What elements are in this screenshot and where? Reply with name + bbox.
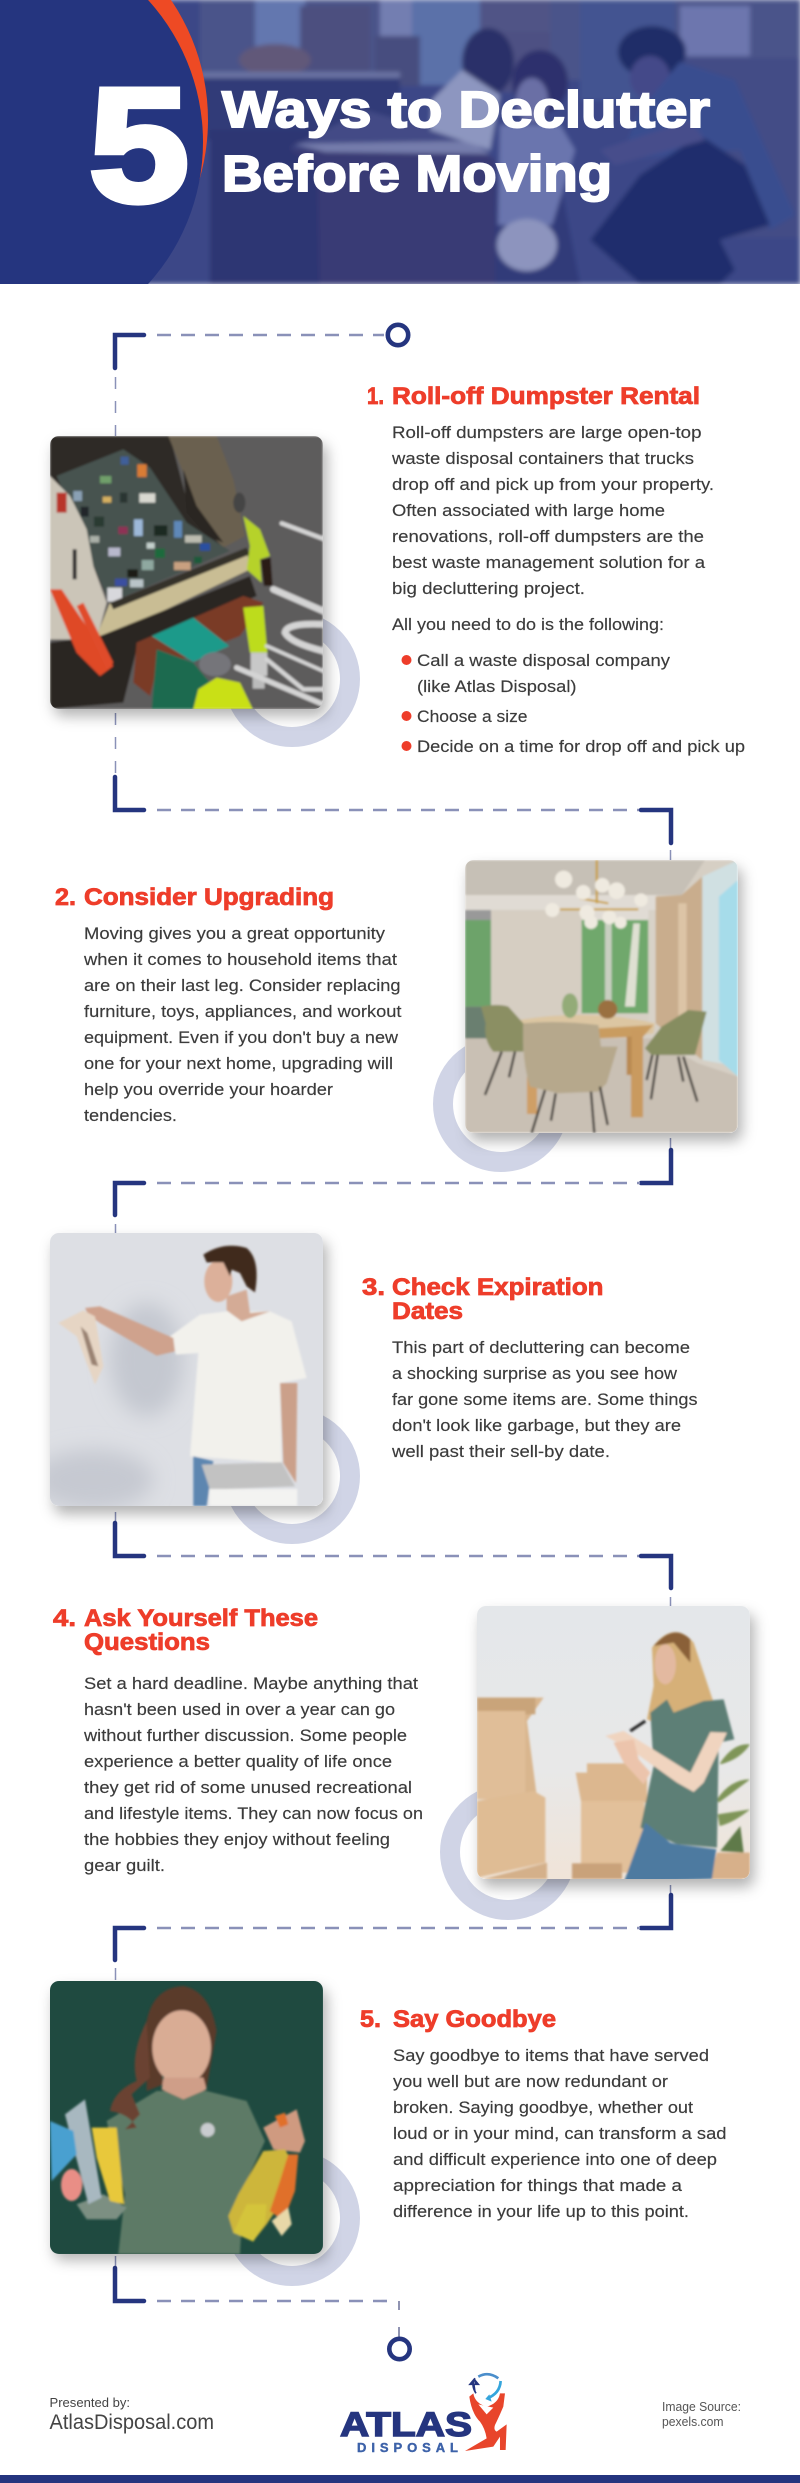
- text block: roll-off description: [391, 424, 714, 634]
- title: Before Moving: [222, 145, 612, 202]
- text block: questions: experience a better quality of life once: [84, 1753, 392, 1771]
- bullet list: (like Atlas Disposal): [417, 678, 576, 696]
- bullet list: [402, 652, 745, 756]
- text block: roll-off description: best waste management solution for a: [392, 554, 706, 572]
- text block: expiration dates: far gone some items are. Some things: [392, 1391, 698, 1409]
- header photo: man: [618, 26, 686, 78]
- text block: say goodbye: and difficult experience into one of deep: [393, 2151, 717, 2169]
- header photo: family packing boxes: [148, 0, 800, 284]
- text block: questions: they get rid of some unused recreational: [84, 1779, 412, 1797]
- footer: image source: [662, 2400, 741, 2429]
- panel: section 5: [50, 1981, 726, 2254]
- bullet list: Call a waste disposal company: [417, 652, 671, 670]
- footer: presented by: [50, 2395, 214, 2434]
- photo: woman holding waste: [50, 1981, 323, 2254]
- text block: upgrading: [83, 925, 402, 1125]
- panel: section 2: [55, 860, 738, 1133]
- navy circle: [0, 0, 203, 284]
- start circle: [388, 325, 408, 345]
- heading: 3: [362, 1274, 604, 1325]
- photo: man holding old shoes: [33, 1233, 323, 1510]
- text block: roll-off description: Roll-off dumpsters are large open-top: [392, 424, 702, 442]
- connector path: [115, 325, 671, 2359]
- logo wordmark: ATLAS: ATLAS: [340, 2406, 472, 2444]
- text block: roll-off description: drop off and pick up from your property.: [392, 476, 714, 494]
- footer: image source: Image Source:: [662, 2400, 741, 2414]
- heading: 3: Dates: [392, 1298, 463, 1325]
- text block: upgrading: help you override your hoarder: [84, 1081, 334, 1099]
- text block: upgrading: equipment. Even if you don't buy a new: [84, 1029, 398, 1047]
- big number 5: 5: [89, 55, 189, 236]
- text block: say goodbye: [393, 2047, 726, 2221]
- footer: image source: pexels.com: [662, 2415, 724, 2429]
- heading: 5: Say Goodbye: [393, 2006, 556, 2033]
- heading: 4: Ask Yourself These: [84, 1605, 318, 1632]
- text block: roll-off description: renovations, roll-off dumpsters are the: [392, 528, 704, 546]
- text block: questions: the hobbies they enjoy without feeling: [84, 1831, 390, 1849]
- logo wordmark: DISPOSAL: DISPOSAL: [357, 2440, 458, 2455]
- photo: dining room: [465, 860, 738, 1133]
- header photo: girl: [462, 28, 514, 96]
- text block: upgrading: Moving gives you a great opportunity: [84, 925, 386, 943]
- text block: say goodbye: difference in your life up to this point.: [393, 2203, 689, 2221]
- text block: upgrading: tendencies.: [84, 1107, 177, 1125]
- text block: say goodbye: loud or in your mind, can transform a sad: [393, 2125, 726, 2143]
- text block: questions: [83, 1675, 423, 1875]
- bullet list: Choose a size: [417, 708, 528, 726]
- bullet list: Decide on a time for drop off and pick up: [417, 738, 745, 756]
- heading: 1: 1.: [367, 383, 384, 410]
- end circle: [389, 2339, 410, 2359]
- header banner: [0, 0, 800, 284]
- heading: 1: Roll-off Dumpster Rental: [392, 383, 700, 410]
- heading: 2: 2.: [55, 884, 76, 911]
- text block: roll-off description: waste disposal containers that trucks: [391, 450, 694, 468]
- text block: say goodbye: broken. Saying goodbye, whether out: [393, 2099, 693, 2117]
- heading: 2: Consider Upgrading: [84, 884, 334, 911]
- footer: presented by: Presented by:: [50, 2395, 130, 2410]
- text block: say goodbye: Say goodbye to items that have served: [393, 2047, 709, 2065]
- panel: section 1: [50, 383, 745, 756]
- decorative rings behind photos: [234, 621, 566, 2276]
- text block: expiration dates: This part of decluttering can become: [392, 1339, 690, 1357]
- text block: upgrading: one for your next home, upgrading will: [84, 1055, 393, 1073]
- text block: upgrading: when it comes to household items that: [83, 951, 397, 969]
- heading: 4: 4.: [53, 1605, 76, 1632]
- photo: garbage truck: [50, 436, 323, 709]
- bottom bar: [0, 2475, 800, 2483]
- text block: questions: Set a hard deadline. Maybe anything that: [84, 1675, 418, 1693]
- text block: say goodbye: appreciation for things that made a: [393, 2177, 683, 2195]
- text block: expiration dates: well past their sell-by date.: [391, 1443, 610, 1461]
- text block: roll-off description: Often associated with large home: [392, 502, 665, 520]
- heading: 3: 3.: [362, 1274, 385, 1301]
- header photo: woman: [512, 50, 568, 114]
- text block: questions: without further discussion. Some people: [83, 1727, 407, 1745]
- text block: upgrading: are on their last leg. Consider replacing: [84, 977, 400, 995]
- text block: expiration dates: a shocking surprise as you see how: [392, 1365, 677, 1383]
- text block: roll-off description: All you need to do is the following:: [392, 616, 664, 634]
- logo: Atlas Disposal: [340, 2374, 507, 2455]
- logo: orange figure and recycling arrows: [465, 2374, 507, 2451]
- text block: roll-off description: big decluttering project.: [392, 580, 585, 598]
- text block: say goodbye: you well but are now redundant or: [393, 2073, 669, 2091]
- heading: 3: Check Expiration: [392, 1274, 604, 1301]
- photo: woman with clipboard: [477, 1606, 750, 1883]
- heading: 5: 5.: [360, 2006, 381, 2033]
- text block: expiration dates: [391, 1339, 698, 1461]
- orange crescent: [148, 0, 208, 181]
- heading: 4: [53, 1605, 318, 1656]
- title: Ways to Declutter: [222, 81, 710, 138]
- text block: questions: and lifestyle items. They can now focus on: [84, 1805, 423, 1823]
- text block: questions: gear guilt.: [84, 1857, 165, 1875]
- title: [222, 81, 710, 202]
- text block: upgrading: furniture, toys, appliances, and workout: [84, 1003, 402, 1021]
- text block: questions: hasn't been used in over a year can go: [84, 1701, 395, 1719]
- footer: presented by: AtlasDisposal.com: [50, 2411, 214, 2434]
- panel: section 4: [53, 1605, 750, 1883]
- heading: 4: Questions: [84, 1629, 210, 1656]
- text block: expiration dates: don't look like garbage, but they are: [392, 1417, 681, 1435]
- panel: section 3: [33, 1233, 697, 1510]
